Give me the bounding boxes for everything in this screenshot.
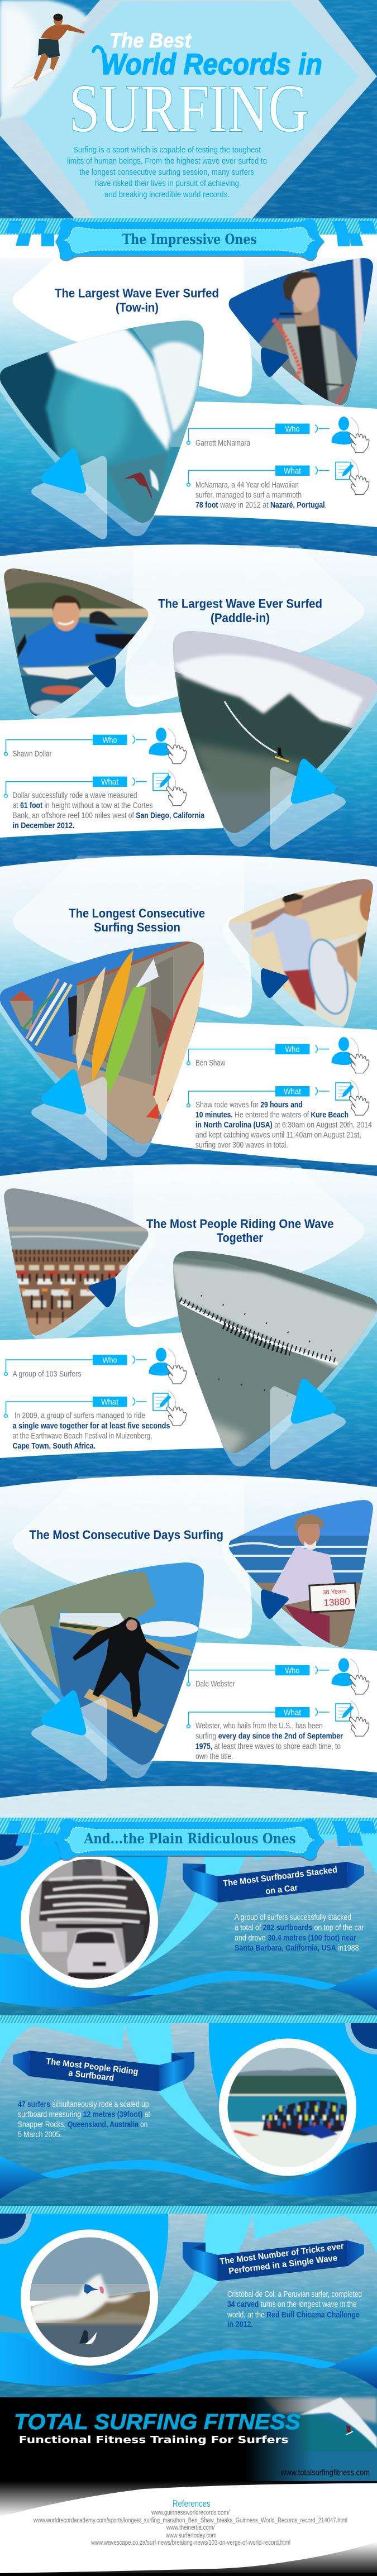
panel: plain ridiculous two, people on a surfboard <box>0 2023 377 2199</box>
who row: section 3 <box>187 1036 369 1073</box>
panel: section 2 info <box>0 712 223 838</box>
what row: section 2: in December 2012. <box>12 821 75 830</box>
what row: section 3: What <box>284 1087 302 1097</box>
photo: surfboards stacked on a car <box>28 1857 151 1982</box>
references text <box>33 2498 347 2546</box>
section 3 triangle accents <box>31 968 289 1160</box>
what row: section 4: a single wave together for at least five seconds <box>12 1422 170 1431</box>
section 3 title: Surfing Session <box>94 920 180 934</box>
intro text: and breaking incredible world records. <box>104 190 230 199</box>
text: surfboards on a car <box>235 1913 364 1953</box>
references text: www.surfertoday.com <box>165 2532 216 2539</box>
ribbon: the most people riding a surfboard: The Most People Riding <box>46 2057 139 2077</box>
text: surfboards on a car: a total of 282 surfboards on top of the car <box>235 1924 364 1933</box>
text: people on a surfboard: 47 surfers simultaneously rode a scaled up <box>18 2100 149 2109</box>
who row: section 5: Who <box>285 1666 299 1675</box>
panel: section 5 info <box>151 1642 377 1772</box>
what row: section 1: What <box>284 466 302 476</box>
panel: section 3 info <box>151 1022 377 1165</box>
what row: section 4: What <box>101 1397 119 1407</box>
text: surfboards on a car: Santa Barbara, California, USA in1988. <box>235 1944 361 1953</box>
who row: section 5 <box>187 1657 369 1694</box>
ribbon: the most people riding a surfboard <box>13 2051 194 2091</box>
section 3 title: The Longest Consecutive <box>69 906 205 920</box>
photo: crowd on giant surfboard <box>226 2047 349 2169</box>
section 4 title: Together <box>217 1231 263 1245</box>
section 4 title <box>146 1217 334 1245</box>
what row: section 3: surfing over 300 waves in total. <box>195 1141 288 1150</box>
ribbon: the most surfboards stacked on a car <box>183 1862 364 1903</box>
section 5 title: The Most Consecutive Days Surfing <box>29 1528 223 1542</box>
photo: crowd of surfers on the beach <box>4 1188 149 1336</box>
section 4 title: The Most People Riding One Wave <box>146 1217 334 1231</box>
text: people on a surfboard: 5 March 2005. <box>18 2130 62 2139</box>
section 3 background shapes <box>0 856 347 1157</box>
text: tricks in a wave <box>227 2290 362 2329</box>
heading: The Impressive Ones: The Impressive Ones <box>122 231 257 247</box>
text: tricks in a wave: 34 carved turns on the longest wave in the <box>227 2300 357 2309</box>
heading: The Impressive Ones <box>6 219 377 261</box>
references text: References <box>173 2498 211 2509</box>
photo: Dale Webster holding his 13880 sign: 38 Years <box>322 1588 347 1596</box>
references text: www.theinertia.com/ <box>166 2525 215 2531</box>
what row: section 5: What <box>284 1708 302 1718</box>
who row: section 2: Who <box>103 735 117 745</box>
what row: section 5: 1975, at least three waves to shore each time, to <box>195 1742 341 1751</box>
text: tricks in a wave: world, at the Red Bull Chicama Challenge <box>227 2311 360 2320</box>
section 2 title: (Paddle-in) <box>211 611 270 625</box>
title: The Best <box>109 29 192 52</box>
ribbon: the most number of tricks: Performed in a Single Wave <box>228 2253 338 2276</box>
title: SURFING <box>69 71 309 146</box>
section 1 title <box>55 286 219 314</box>
what row: section 2: Bank, an offshore reef 100 miles west of San Diego, California <box>12 811 205 820</box>
footer banner: Total Surfing Fitness: TOTAL SURFING FITNESS <box>14 2410 300 2434</box>
who row: section 4 <box>4 1347 187 1384</box>
section 4 background shapes <box>30 1165 377 1466</box>
who row: section 5: Dale Webster <box>195 1680 235 1689</box>
section 2 background shapes <box>30 545 377 847</box>
what row: section 3 <box>187 1078 372 1150</box>
section 5 triangle accents <box>31 1589 289 1781</box>
text: tricks in a wave: in 2012. <box>227 2320 253 2329</box>
intro text: limits of human beings. From the highest wave ever surfed to <box>67 156 267 166</box>
what row: section 4: Cape Town, South Africa. <box>12 1442 96 1451</box>
what row: section 4: In 2009, a group of surfers managed to ride <box>15 1412 145 1421</box>
section 1 title: The Largest Wave Ever Surfed <box>55 286 219 300</box>
what row: section 2: What <box>101 777 119 787</box>
photo: Dale Webster in the barrel <box>0 1555 209 1772</box>
what row: section 3: Shaw rode waves for 29 hours and <box>195 1101 303 1110</box>
what row: section 1 <box>187 458 369 510</box>
photo: giant tow-in wave <box>0 313 209 531</box>
footer banner: Total Surfing Fitness <box>0 2397 377 2481</box>
who row: section 2: Shawn Dollar <box>12 750 52 759</box>
section 3 title <box>69 906 205 934</box>
what row: section 2 <box>4 769 205 830</box>
photo: Garrett McNamara portrait <box>228 258 373 405</box>
section 1 title: (Tow-in) <box>116 300 159 314</box>
what row: section 1: surfer, managed to surf a mammoth <box>195 491 302 500</box>
what row: section 2: Dollar successfully rode a wave measured <box>12 791 137 800</box>
heading: And...the Plain Ridiculous Ones: And...the Plain Ridiculous Ones <box>84 1831 296 1847</box>
text: surfboards on a car: and drove 30.4 metres (100 foot) near <box>235 1934 356 1943</box>
section 1 triangle accents <box>31 347 289 539</box>
what row: section 4: at the Earthwave Beach Festival in Muizenberg, <box>12 1432 152 1441</box>
ribbon: the most people riding a surfboard: a Surfboard <box>68 2068 114 2083</box>
text: people on a surfboard <box>18 2100 150 2139</box>
ribbon: the most surfboards stacked on a car: The Most Surfboards Stacked <box>222 1865 338 1889</box>
what row: section 1: McNamara, a 44 Year old Hawaiian <box>195 481 299 490</box>
intro text: have risked their lives in pursuit of achieving <box>95 179 239 188</box>
text: surfboards on a car: A group of surfers successfully stacked <box>235 1913 351 1922</box>
what row: section 5: Webster, who hails from the U.S., has been <box>195 1722 323 1731</box>
who row: section 1: Who <box>285 424 299 434</box>
photo: Paddle-in giant wave <box>170 628 377 838</box>
panel: references background <box>0 2481 377 2576</box>
intro text: the longest consecutive surfing session, many surfers <box>79 168 254 177</box>
references text: www.guinnessworldrecords.com/ <box>151 2510 230 2516</box>
intro text <box>67 145 267 199</box>
section 5 background shapes <box>0 1476 347 1778</box>
panel: plain ridiculous one, surfboards on a car <box>0 1834 377 2010</box>
what row: section 5: surfing every day since the 2nd of September <box>195 1732 343 1741</box>
what row: section 3: 10 minutes. He entered the waters of Kure Beach <box>195 1111 349 1120</box>
section 4 triangle accents <box>88 1278 346 1470</box>
photo: Dale Webster holding his 13880 sign: 13880 <box>323 1596 350 1608</box>
photo: surfer carving a wave <box>28 2234 154 2359</box>
text: people on a surfboard: Snapper Rocks, Queensland, Australia on <box>18 2120 147 2129</box>
who row: section 1 <box>187 415 369 452</box>
photo: surfboards against a wall <box>0 934 209 1151</box>
section 1 background shapes <box>0 235 377 536</box>
hero: hexagon panels <box>0 0 377 218</box>
who row: section 3: Who <box>285 1045 299 1054</box>
intro text: Surfing is a sport which is capable of testing the toughest <box>73 145 261 155</box>
heading: And...the Plain Ridiculous Ones <box>6 1819 377 1861</box>
photo: Dale Webster holding his 13880 sign <box>228 1500 373 1647</box>
what row: section 2: at 61 foot in height without a tow at the Cortes <box>12 801 153 810</box>
footer banner: Total Surfing Fitness: Functional Fitness Training For Surfers <box>19 2434 289 2446</box>
section 2 triangle accents <box>88 658 346 850</box>
title <box>69 29 322 146</box>
who row: section 2 <box>4 727 187 764</box>
who row: section 4: A group of 103 Surfers <box>12 1370 82 1379</box>
photo: Ben Shaw on the beach <box>229 879 373 1026</box>
ribbon: the most surfboards stacked on a car: on a Car <box>265 1883 298 1896</box>
panel: section 1 info <box>154 402 377 527</box>
section 2 title: The Largest Wave Ever Surfed <box>158 597 322 611</box>
who row: section 1: Garrett McNamara <box>195 439 251 448</box>
section 2 title <box>158 597 322 625</box>
who row: section 3: Ben Shaw <box>195 1059 226 1068</box>
ribbon: the most number of tricks <box>183 2240 364 2281</box>
text: people on a surfboard: surfboard measuring 12 metres (39foot) at <box>18 2110 150 2119</box>
panel: section 4 info <box>0 1332 223 1458</box>
photo: Shawn Dollar portrait <box>4 568 149 716</box>
who row: section 4: Who <box>103 1356 117 1365</box>
panel: plain ridiculous three, tricks in a wave <box>0 2214 377 2389</box>
stripe band: section dividers <box>0 218 377 2214</box>
ribbon: the most number of tricks: The Most Number of Tricks ever <box>219 2242 345 2267</box>
what row: section 1: 78 foot wave in 2012 at Nazaré, Portugal. <box>195 501 327 510</box>
photo: surfer on a wave <box>0 0 89 120</box>
references text: www.wavescape.co.za/surf-news/breaking-news/103-on-verge-of-world-record.html <box>90 2540 290 2546</box>
what row: section 4 <box>4 1389 187 1451</box>
title: World Records in <box>101 48 322 81</box>
photo: surfers lined up riding one wave <box>170 1248 377 1457</box>
what row: section 5: own the title. <box>195 1752 233 1761</box>
what row: section 5 <box>187 1699 369 1761</box>
